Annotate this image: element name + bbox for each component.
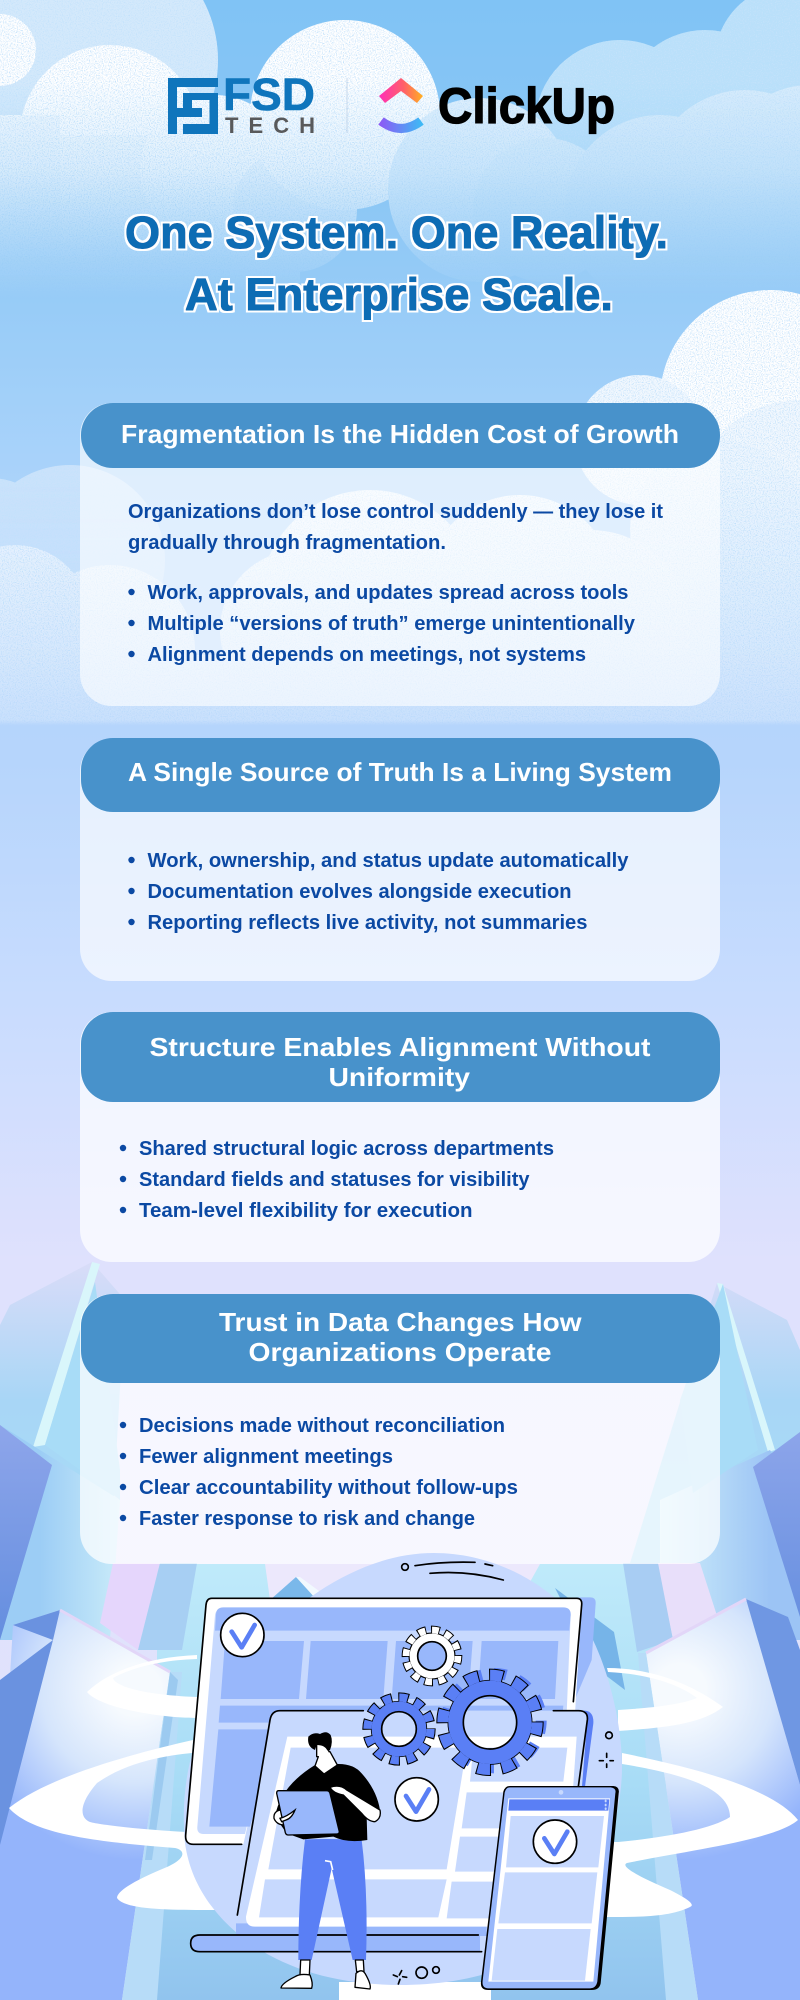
decorative marks top xyxy=(402,1562,503,1580)
logo: ClickUp xyxy=(379,78,615,134)
icon: white gear xyxy=(406,1630,458,1682)
pants xyxy=(298,1839,367,1960)
card heading: Organizations Operate xyxy=(248,1337,552,1367)
icon: large blue gear xyxy=(443,1673,541,1769)
bullet list xyxy=(128,581,636,666)
icon: ClickUp chevron xyxy=(379,78,423,103)
card heading: Trust in Data Changes How xyxy=(219,1307,582,1337)
bullet list xyxy=(120,1414,518,1530)
card heading: A Single Source of Truth Is a Living System xyxy=(128,757,672,787)
card heading xyxy=(81,1294,720,1383)
laptop xyxy=(236,1711,593,1936)
person xyxy=(274,1732,380,1989)
decorative marks right xyxy=(599,1732,613,1767)
shirt xyxy=(275,1764,380,1841)
panel: structure xyxy=(80,1012,720,1262)
laptop base xyxy=(191,1935,482,1952)
card body xyxy=(80,1294,720,1564)
intro text: gradually through fragmentation. xyxy=(128,531,446,554)
card heading: Fragmentation Is the Hidden Cost of Growth xyxy=(121,419,679,449)
bullet list: Work, approvals, and updates spread across tools xyxy=(148,581,628,604)
icon: check badge monitor xyxy=(221,1613,264,1657)
panel: fragmentation xyxy=(80,403,720,706)
neck and face xyxy=(315,1743,337,1774)
bullet list: Documentation evolves alongside execution xyxy=(148,880,572,903)
bullet list: Alignment depends on meetings, not systems xyxy=(148,643,586,666)
panel: trust in data xyxy=(80,1294,720,1564)
icon: ClickUp arc xyxy=(381,121,421,128)
illustration: team member with devices xyxy=(186,1562,619,1990)
card heading xyxy=(81,403,720,468)
card heading: Structure Enables Alignment Without xyxy=(150,1032,651,1062)
bullet list: Work, ownership, and status update automatically xyxy=(148,849,629,872)
ClickUp wordmark: ClickUp xyxy=(438,78,615,134)
phone xyxy=(481,1786,619,1990)
intro text: Organizations don’t lose control suddenly — they lose it xyxy=(128,500,663,523)
title xyxy=(125,207,668,320)
bullet list: Team-level flexibility for execution xyxy=(139,1199,473,1222)
bullet list xyxy=(120,1137,554,1222)
FSD wordmark: FSD xyxy=(223,69,315,120)
white swirl rings xyxy=(9,1655,798,1917)
bullet list: Reporting reflects live activity, not summaries xyxy=(148,911,588,934)
bullet list: Fewer alignment meetings xyxy=(139,1445,393,1468)
card heading: Uniformity xyxy=(328,1062,471,1092)
background clouds xyxy=(0,0,800,740)
bullet list: Clear accountability without follow-ups xyxy=(139,1476,518,1499)
bullet list xyxy=(128,849,629,934)
monitor xyxy=(186,1597,596,1844)
hair xyxy=(308,1732,332,1751)
icon: check badge phone xyxy=(533,1820,577,1863)
logo: FSD Tech xyxy=(168,69,315,138)
panel: single source of truth xyxy=(80,738,720,981)
card body xyxy=(80,739,720,981)
card body xyxy=(80,403,720,706)
bullet list: Faster response to risk and change xyxy=(139,1507,475,1530)
socks and shoes xyxy=(281,1960,370,1989)
tablet xyxy=(277,1791,339,1835)
bullet list: Shared structural logic across departments xyxy=(139,1137,554,1160)
divider between logos xyxy=(346,78,348,133)
illustration backdrop blob xyxy=(184,1553,622,1985)
title: One System. One Reality. xyxy=(125,207,668,258)
card heading xyxy=(81,1012,720,1102)
decorative marks bottom xyxy=(393,1967,439,1984)
arm xyxy=(330,1786,380,1822)
background buildings xyxy=(0,1262,800,2000)
icon: FSD mark xyxy=(168,78,218,134)
bullet list: Standard fields and statuses for visibility xyxy=(139,1168,530,1191)
title: At Enterprise Scale. xyxy=(185,269,613,320)
TECH wordmark: TECH xyxy=(225,113,315,138)
intro text xyxy=(128,500,663,554)
icon: small blue gear xyxy=(367,1697,430,1760)
hand xyxy=(274,1809,295,1825)
bullet list: Multiple “versions of truth” emerge unintentionally xyxy=(148,612,636,635)
card heading xyxy=(81,738,720,812)
card body xyxy=(80,1012,720,1262)
bullet list: Decisions made without reconciliation xyxy=(139,1414,505,1437)
icon: check badge laptop xyxy=(395,1778,438,1821)
